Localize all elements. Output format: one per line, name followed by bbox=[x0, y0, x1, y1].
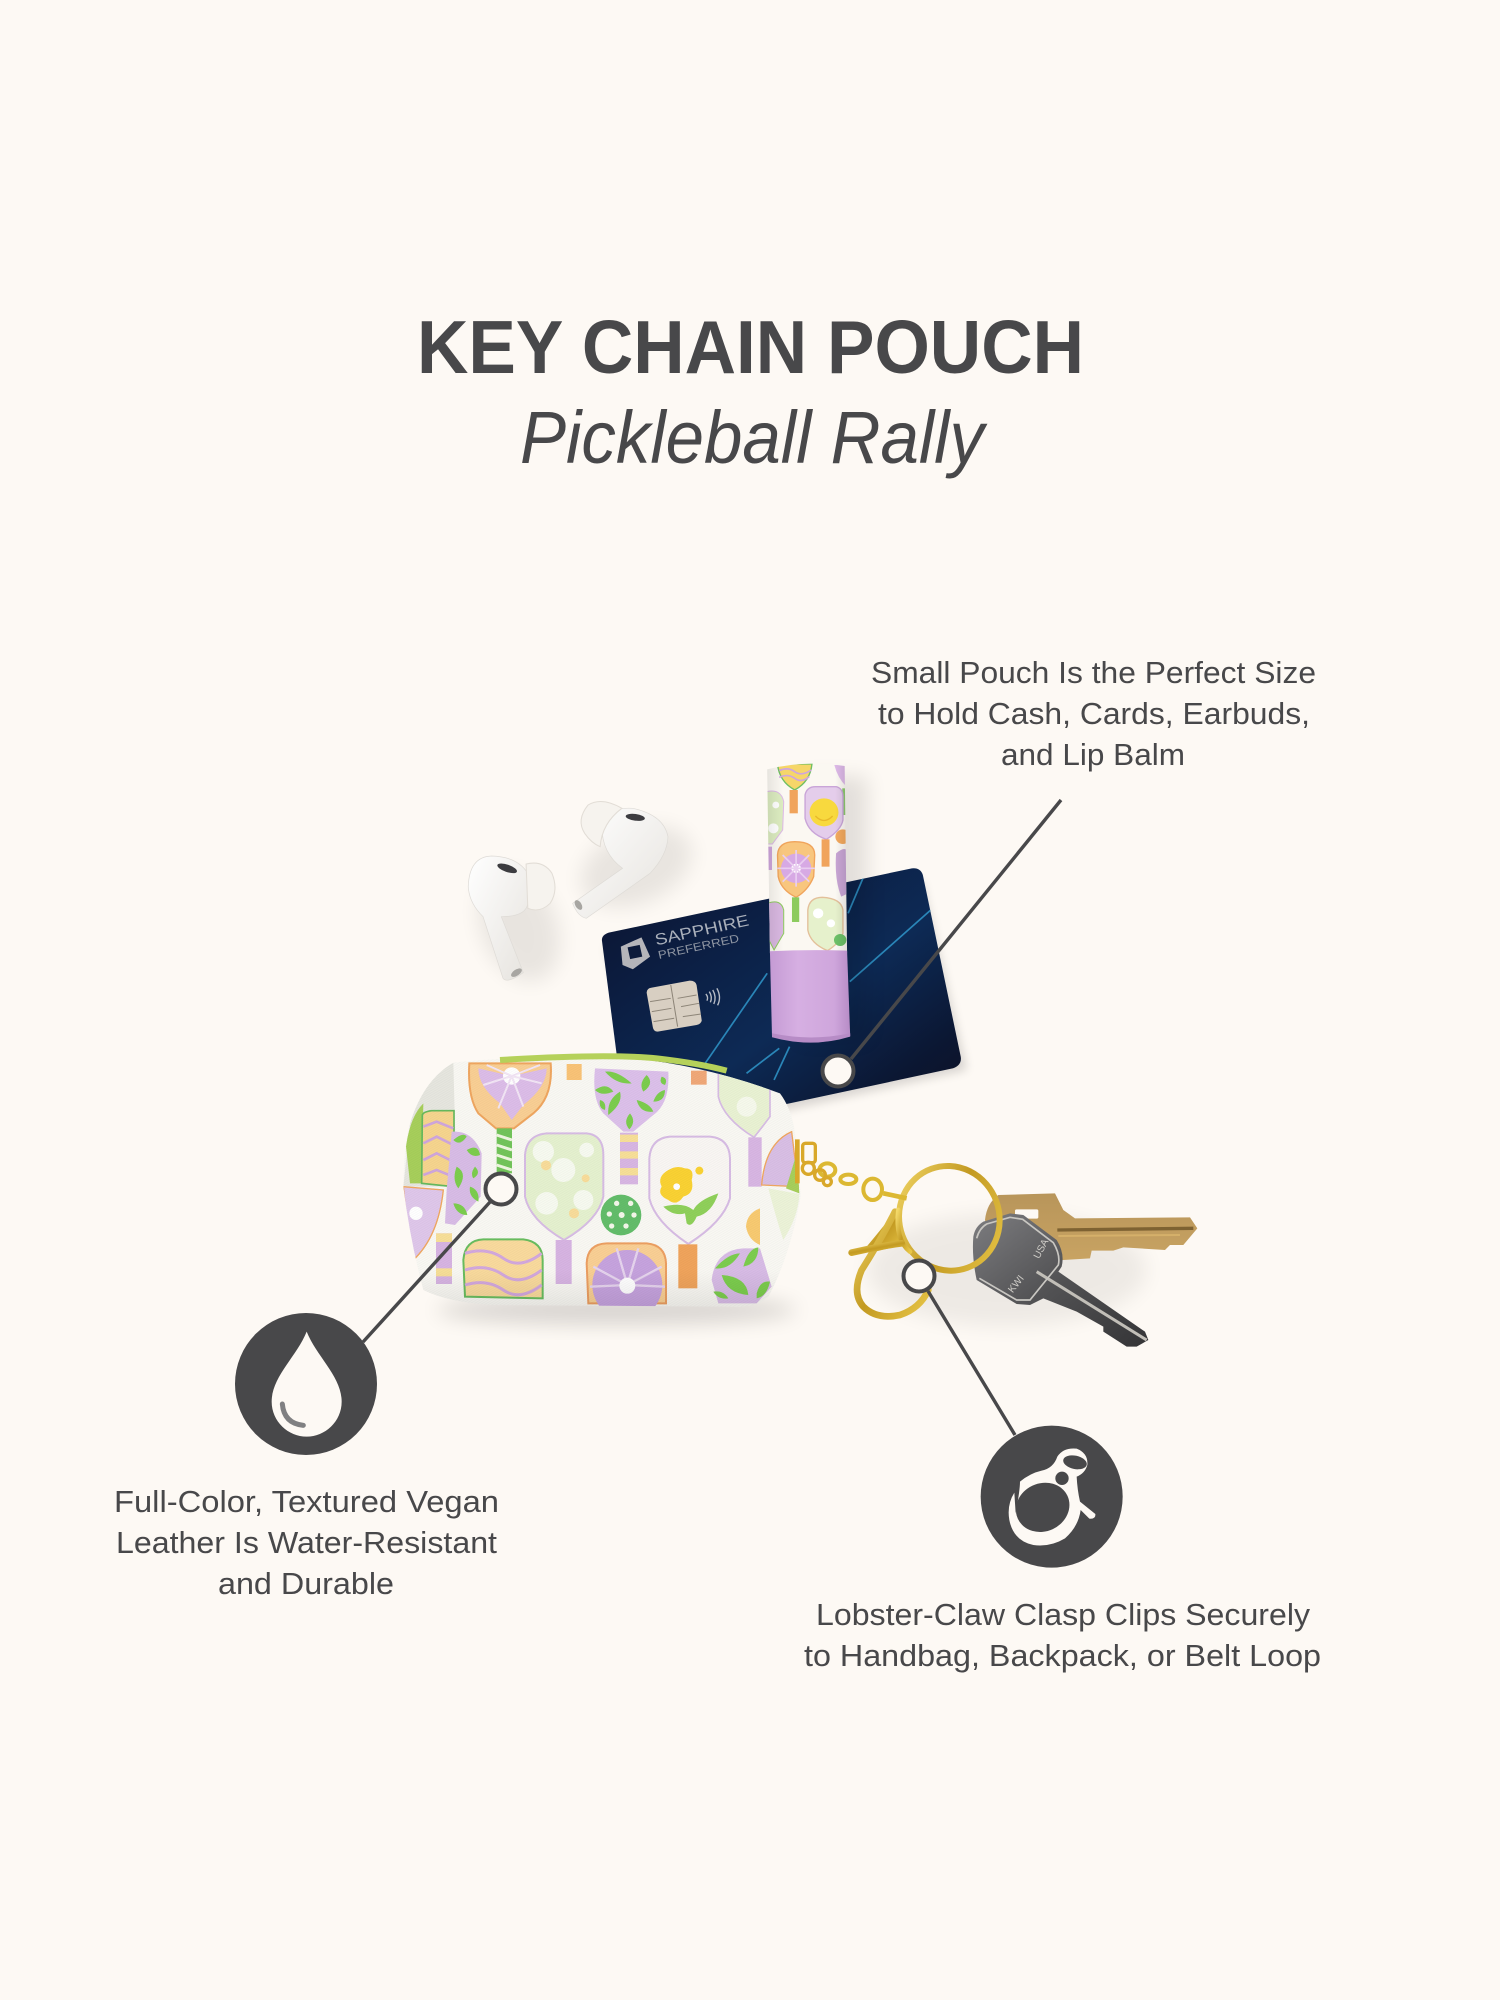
silver key bbox=[973, 1213, 1148, 1347]
callout text: vegan leather: Leather Is Water-Resistant bbox=[116, 1525, 497, 1560]
callout text: small pouch: Small Pouch Is the Perfect Size bbox=[871, 655, 1316, 690]
callout text: small pouch: to Hold Cash, Cards, Earbuds, bbox=[878, 696, 1310, 731]
callout text: vegan leather: Full-Color, Textured Vegan bbox=[114, 1484, 499, 1519]
card logo bbox=[621, 937, 650, 969]
leader line: clasp callout bbox=[904, 1260, 1015, 1435]
chain bbox=[819, 1163, 907, 1200]
callout text: small pouch bbox=[871, 655, 1316, 772]
pouch body bbox=[403, 1057, 801, 1307]
photo: key ring and keys bbox=[819, 1152, 1197, 1347]
leader line: card callout bbox=[822, 800, 1061, 1086]
icon: water drop bbox=[235, 1313, 377, 1455]
left gusset bbox=[403, 1063, 457, 1187]
paddle: bottom leaves bbox=[712, 1247, 772, 1303]
card wordmark: SAPPHIRE bbox=[653, 912, 751, 949]
handle: top coral bbox=[691, 1071, 707, 1085]
subtitle: Pickleball Rally bbox=[520, 396, 988, 479]
callout text: vegan leather: and Durable bbox=[218, 1566, 394, 1601]
card chip bbox=[647, 981, 702, 1032]
callout text: lobster clasp: Lobster-Claw Clasp Clips Securely bbox=[816, 1597, 1311, 1632]
ball bbox=[601, 1195, 641, 1235]
paddle: yellow flower bbox=[649, 1137, 730, 1288]
paddle: leaves bbox=[594, 1068, 668, 1184]
handle: top orange bbox=[567, 1064, 582, 1080]
callout text: vegan leather bbox=[114, 1484, 499, 1601]
right earbud bbox=[573, 802, 668, 918]
side flap left bbox=[403, 1187, 443, 1260]
title: KEY CHAIN POUCH bbox=[417, 305, 1084, 389]
zipper bbox=[500, 1056, 727, 1071]
brass key bbox=[985, 1193, 1197, 1263]
callout text: small pouch: and Lip Balm bbox=[1001, 737, 1185, 772]
photo: lip balm tube bbox=[766, 764, 867, 1043]
paddle: upper right pale bbox=[718, 1073, 770, 1187]
silver key: KWI bbox=[1006, 1274, 1027, 1295]
zipper pull ring bbox=[797, 1139, 831, 1186]
leader line: pouch callout bbox=[363, 1174, 516, 1342]
paddle: bottom flower bbox=[586, 1242, 667, 1306]
left earbud bbox=[468, 856, 555, 980]
callout text: lobster clasp bbox=[804, 1597, 1321, 1673]
contactless icon bbox=[706, 988, 719, 1005]
callout text: lobster clasp: to Handbag, Backpack, or Belt Loop bbox=[804, 1638, 1321, 1673]
silver key: USA bbox=[1032, 1237, 1051, 1261]
paddle: top flower bbox=[469, 1063, 551, 1173]
icon: lobster clasp bbox=[981, 1426, 1123, 1568]
lobster clasp bbox=[852, 1210, 928, 1316]
right side bbox=[746, 1132, 799, 1245]
paddle: pale daisy bbox=[525, 1133, 603, 1284]
photo: pouch bbox=[390, 1040, 831, 1340]
photo: earbuds bbox=[464, 802, 705, 992]
tube pattern bbox=[766, 764, 851, 951]
left leaf paddle bbox=[436, 1132, 482, 1284]
photo: credit card bbox=[602, 868, 967, 1140]
paddle: bottom waves bbox=[463, 1239, 543, 1298]
photo: credit card: PREFERRED bbox=[657, 933, 740, 962]
gold ring bbox=[884, 1152, 1014, 1285]
